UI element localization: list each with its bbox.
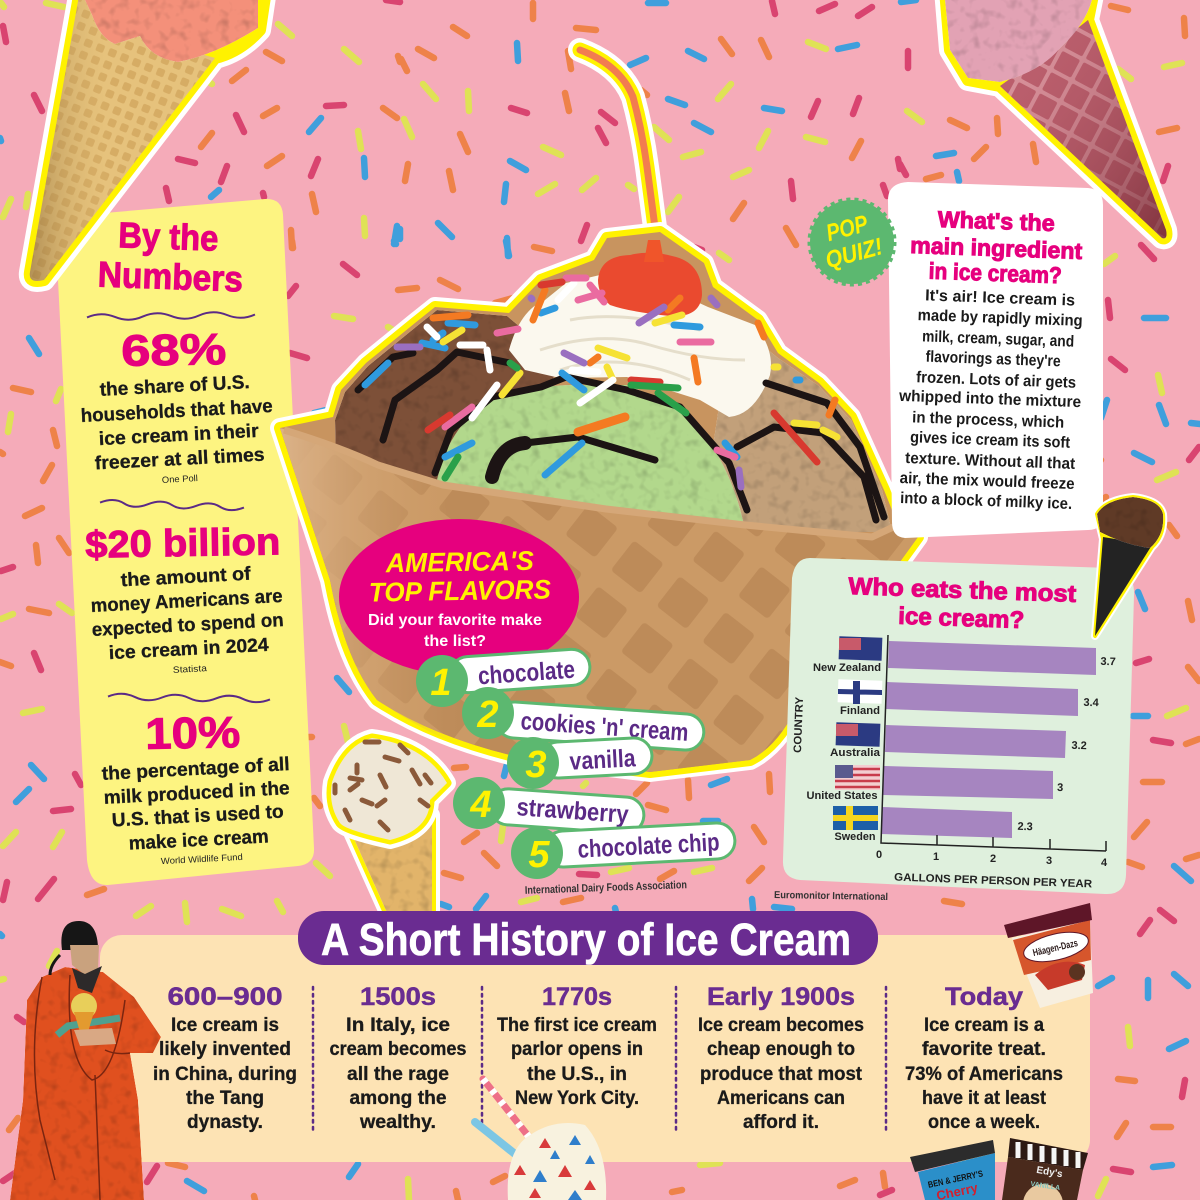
flavor 4 [453, 777, 645, 834]
bar chart: 2 [990, 853, 996, 865]
tan scoop [700, 345, 892, 532]
quiz answer: in the process, which [912, 409, 1064, 432]
timeline: 1500s: among the [350, 1088, 446, 1109]
timeline: 600-900: 600–900 [168, 983, 282, 1011]
timeline: early 1900s: Americans can [717, 1088, 845, 1109]
flag: sweden [833, 806, 878, 843]
sundae sprinkles [365, 278, 837, 487]
stat: 10 percent [101, 708, 290, 866]
flavor 3 [507, 737, 653, 789]
timeline: today: Ice cream is a [924, 1015, 1044, 1036]
stat: 10 percent: make ice cream [128, 826, 269, 855]
flag: australia: Australia [830, 747, 881, 759]
quiz question: in ice cream? [928, 258, 1062, 288]
stat: 68 percent: One Poll [162, 473, 198, 485]
flavor 5: chocolate chip [577, 828, 720, 864]
bar chart: 1 [933, 851, 939, 863]
timeline: 1770s: the U.S., in [527, 1064, 627, 1085]
flavor 5: 5 [528, 834, 550, 876]
stat: 20 billion: money Americans are [90, 586, 283, 617]
whipped cream [509, 275, 771, 417]
flavor 1: chocolate [477, 656, 576, 690]
stat: 10 percent: World Wildlife Fund [161, 852, 243, 866]
timeline: early 1900s: Early 1900s [707, 983, 855, 1011]
illustration: tang emperor holding cone [10, 921, 161, 1200]
stat: 20 billion: ice cream in 2024 [108, 635, 270, 664]
callout: america's top flavors: the list? [424, 633, 486, 650]
badge: pop quiz: POP [823, 210, 872, 247]
panel: what's the main ingredient [888, 182, 1103, 538]
timeline: early 1900s: produce that most [700, 1064, 863, 1085]
cherry stem [580, 50, 658, 250]
icon: ben and jerry's tub [910, 1140, 995, 1200]
stat: 68 percent: the share of U.S. [99, 372, 250, 401]
list: top flavors [416, 648, 736, 879]
timeline: 600-900: in China, during [153, 1064, 297, 1085]
flavor 1 [416, 648, 591, 707]
stat: 68 percent: households that have [80, 396, 273, 427]
bar chart [792, 635, 1116, 890]
chocolate scoop [335, 310, 560, 490]
flavor 4: 4 [469, 784, 492, 826]
stat: 68 percent: ice cream in their [98, 421, 260, 450]
quiz question: main ingredient [910, 232, 1083, 264]
quiz answer: texture. Without all that [905, 450, 1076, 473]
illustration: milkshake [475, 1079, 606, 1200]
icon: edy's tub [1002, 1138, 1088, 1200]
icon: black cone [1095, 497, 1163, 636]
callout: america's top flavors: TOP FLAVORS [369, 574, 551, 608]
timeline: early 1900s: cheap enough to [707, 1039, 855, 1060]
bar chart: 3.2 [1071, 740, 1087, 752]
quiz answer: into a block of milky ice. [900, 490, 1072, 513]
stat: 10 percent: 10% [145, 708, 241, 759]
callout: america's top flavors: Did your favorite make [368, 612, 542, 629]
quiz answer: made by rapidly mixing [917, 307, 1083, 330]
source: international dairy foods association: International Dairy Foods Association [525, 879, 687, 897]
bar chart: GALLONS PER PERSON PER YEAR [894, 872, 1092, 890]
callout: america's top flavors: AMERICA'S [385, 546, 534, 578]
timeline: 1500s: In Italy, ice [346, 1015, 450, 1036]
stat: 10 percent: U.S. that is used to [111, 802, 284, 831]
timeline: early 1900s: afford it. [743, 1112, 819, 1133]
icon: edy's tub: VANILLA [1030, 1181, 1060, 1192]
flag: new zealand [813, 636, 882, 674]
timeline: 1500s: cream becomes [330, 1039, 466, 1060]
stat: 20 billion: expected to spend on [91, 610, 284, 641]
timeline: 1770s [497, 983, 657, 1109]
flavor 1: 1 [430, 662, 452, 704]
timeline: today: have it at least [922, 1088, 1047, 1109]
badge: pop quiz [810, 200, 894, 284]
quiz answer [898, 287, 1083, 513]
icon: small vanilla cone [331, 738, 447, 915]
icon: ben and jerry's tub: BEN & JERRY'S [927, 1168, 984, 1190]
flavor 3: 3 [525, 744, 547, 786]
icon: top-right cone [945, 0, 1166, 238]
flag: sweden: Sweden [834, 831, 876, 843]
timeline: 600-900: dynasty. [187, 1112, 263, 1133]
timeline: 600-900: likely invented [159, 1039, 291, 1060]
stat: 20 billion: the amount of [120, 564, 252, 591]
flag: new zealand: New Zealand [813, 662, 881, 674]
stat: 20 billion [85, 521, 284, 675]
flavor 5 [511, 822, 736, 879]
bar chart: 3 [1057, 782, 1063, 794]
source: euromonitor international: Euromonitor International [774, 890, 888, 903]
timeline: 1500s: wealthy. [359, 1112, 436, 1133]
chart title: Who eats the most [848, 573, 1077, 608]
timeline: today: Today [945, 983, 1023, 1011]
timeline: 1770s: parlor opens in [511, 1039, 643, 1060]
timeline: today [905, 983, 1063, 1133]
flag: finland [838, 679, 882, 717]
green scoop [437, 385, 745, 530]
quiz answer: frozen. Lots of air gets [916, 369, 1076, 392]
heading: by the numbers: By the [118, 214, 219, 259]
quiz answer: milk, cream, sugar, and [922, 328, 1074, 351]
panel: short history [100, 935, 1090, 1162]
quiz question: What's the [937, 206, 1055, 236]
timeline: 1500s [330, 983, 466, 1133]
panel: who eats the most ice cream [783, 558, 1134, 894]
flavor 2: 2 [476, 694, 499, 736]
chart title: ice cream? [898, 603, 1025, 634]
timeline: today: favorite treat. [922, 1039, 1046, 1060]
icon: haagen-dazs tub [1004, 903, 1093, 1008]
flag: united states: United States [806, 790, 878, 802]
flavor 2: cookies 'n' cream [520, 707, 689, 747]
stat: 20 billion: $20 billion [85, 521, 281, 567]
bar chart: 3.7 [1100, 656, 1116, 668]
icon: haagen-dazs tub: Häagen-Dazs [1032, 938, 1079, 959]
bar chart: 4 [1101, 857, 1108, 869]
bar chart: 2.3 [1017, 821, 1033, 833]
quiz answer: It's air! Ice cream is [925, 287, 1076, 310]
stat: 68 percent: 68% [121, 325, 227, 376]
timeline: 1770s: The first ice cream [497, 1015, 657, 1036]
quiz answer: flavorings as they're [925, 349, 1061, 370]
chocolate drizzle [358, 352, 884, 520]
flag: finland: Finland [840, 705, 880, 717]
chart title [848, 573, 1077, 634]
timeline: 600-900: the Tang [186, 1088, 264, 1109]
bar chart: COUNTRY [792, 696, 806, 753]
timeline: today: once a week. [928, 1112, 1040, 1133]
flavor 2 [462, 687, 705, 751]
timeline: 600-900 [153, 983, 297, 1133]
bar chart: 0 [876, 849, 882, 861]
timeline: early 1900s: Ice cream becomes [698, 1015, 864, 1036]
stat: 10 percent: the percentage of all [101, 754, 290, 785]
timeline: early 1900s [698, 983, 864, 1133]
timeline: 1500s: 1500s [360, 983, 436, 1011]
quiz answer: whipped into the mixture [898, 388, 1081, 411]
heading: by the numbers [97, 214, 244, 300]
timeline: 1770s: 1770s [542, 983, 612, 1011]
callout: america's top flavors [339, 519, 579, 675]
bowl [280, 428, 918, 772]
timeline: 1500s: all the rage [347, 1064, 449, 1085]
stat: 10 percent: milk produced in the [103, 778, 290, 809]
icon: edy's tub: Edy's [1036, 1165, 1064, 1180]
timeline dividers [313, 987, 886, 1131]
timeline: 1770s: New York City. [515, 1088, 639, 1109]
timeline: today: 73% of Americans [905, 1064, 1063, 1085]
flag: australia [830, 722, 881, 759]
flag: united states [806, 765, 880, 802]
outline silhouette [280, 232, 918, 772]
bar chart: 3.4 [1083, 697, 1100, 709]
quiz question [910, 206, 1083, 288]
stat: 20 billion: Statista [173, 663, 207, 675]
icon: top-left cone [30, 0, 266, 281]
timeline: 600-900: Ice cream is [171, 1015, 279, 1036]
heading: by the numbers: Numbers [97, 253, 244, 300]
cherry [598, 253, 702, 316]
quiz answer: air, the mix would freeze [899, 470, 1075, 493]
bar chart: 3 [1046, 855, 1052, 867]
illustration: ice cream sundae [280, 50, 918, 772]
badge: pop quiz: QUIZ! [823, 233, 886, 274]
flavor 3: vanilla [569, 744, 637, 776]
heading: a short history of ice cream: A Short History of Ice Cream [321, 914, 851, 965]
flavor 4: strawberry [516, 793, 629, 829]
stat: 68 percent: freezer at all times [94, 445, 265, 474]
stat: 68 percent [80, 325, 273, 485]
quiz answer: gives ice cream its soft [910, 429, 1071, 452]
panel: by the numbers [58, 199, 314, 885]
